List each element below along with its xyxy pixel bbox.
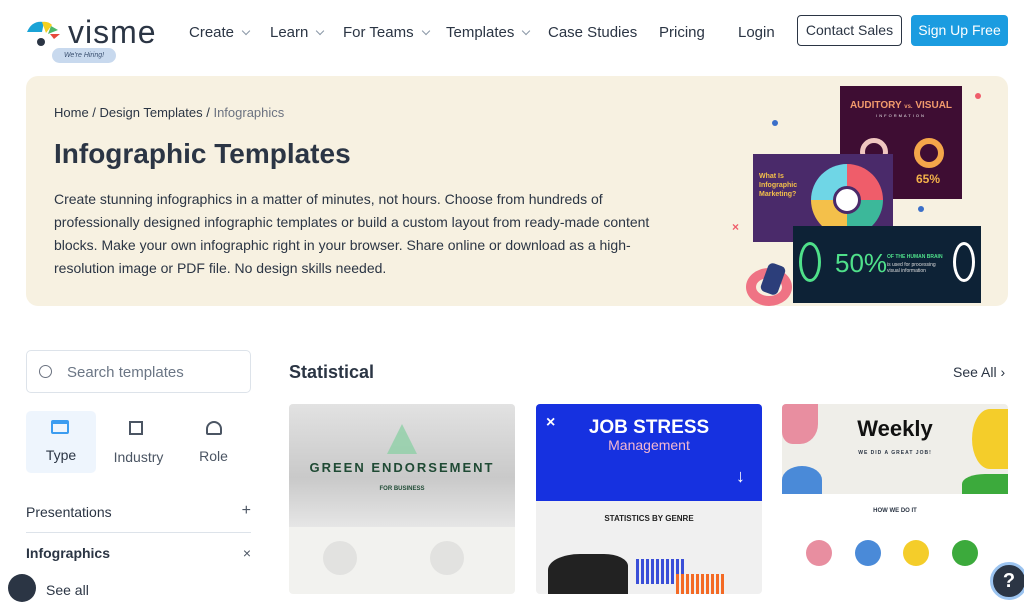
title: Infographic Templates — [54, 138, 351, 169]
card: auditory vs visual: AUDITORY vs. VISUAL — [850, 100, 952, 111]
icon: cookie — [8, 574, 36, 602]
category: presentations: + — [242, 502, 251, 519]
breadcrumb: Home / Design Templates / Infographics — [54, 105, 284, 120]
search box — [26, 350, 251, 393]
card: 50% human brain: visual information — [887, 268, 926, 274]
tab: industry: Industry — [114, 449, 163, 465]
description: Create stunning infographics in a matter of minutes, not hours. Choose from hundreds of professionally designed infographic templates or build a custom layout from ready-made content blocks. Make your own infographic right in your browser. Share online or download as a high-resolution image or PDF file. No design skills needed. — [54, 191, 649, 276]
hero panel — [26, 76, 1008, 306]
button: contact sales: Contact Sales — [806, 22, 893, 38]
category: infographics — [26, 545, 251, 561]
card: what is infographic marketing: Marketing? — [759, 191, 796, 198]
card: what is infographic marketing: What Is — [759, 173, 784, 180]
icon: help button — [990, 562, 1024, 600]
link: see all: See all — [46, 582, 89, 598]
navigation: Case Studies — [548, 24, 637, 41]
button: sign up: Sign Up Free — [918, 22, 1001, 38]
tab: role: Role — [199, 448, 228, 464]
card: 50% human brain: OF THE HUMAN BRAIN — [887, 254, 943, 260]
card: what is infographic marketing — [753, 154, 893, 242]
navigation: Templates — [446, 24, 514, 41]
navigation: Login — [738, 24, 775, 41]
filter tabs — [26, 411, 228, 473]
section heading: Statistical — [289, 362, 374, 382]
card: job stress: STATISTICS BY GENRE — [604, 514, 694, 523]
card: 50% human brain: is used for processing — [887, 262, 936, 268]
tab: type: Type — [46, 447, 76, 463]
card: auditory vs visual — [840, 86, 962, 199]
card: weekly: HOW WE DO IT — [873, 508, 917, 514]
hero illustration — [732, 86, 981, 306]
card: auditory vs visual: INFORMATION — [876, 113, 926, 118]
card: job stress: Management — [608, 437, 690, 453]
category: presentations — [26, 504, 251, 533]
tab: role — [199, 421, 228, 464]
logo: visme — [68, 14, 157, 50]
search box: Search templates — [67, 364, 184, 381]
card: auditory vs visual: 65% — [916, 172, 940, 186]
card: green endorsement: FOR BUSINESS — [379, 486, 424, 492]
3d shape — [746, 268, 792, 306]
navigation: For Teams — [343, 24, 414, 41]
navigation: Learn — [270, 24, 308, 41]
card: what is infographic marketing: Infographic — [759, 182, 797, 189]
card: green endorsement — [289, 404, 515, 594]
button: contact sales — [797, 15, 902, 46]
card: job stress: × — [546, 414, 555, 431]
tab: type — [26, 411, 96, 473]
hero illustration: × — [732, 220, 739, 234]
button: sign up — [911, 15, 1008, 46]
logo — [27, 14, 157, 63]
category: infographics: Infographics — [26, 545, 110, 561]
icon: help button: ? — [1003, 570, 1015, 592]
card: 50% human brain: 50% — [835, 248, 887, 278]
card: green endorsement: GREEN ENDORSEMENT — [310, 460, 494, 475]
category: presentations: Presentations — [26, 504, 112, 520]
tab: industry — [114, 421, 164, 465]
card: weekly: Weekly — [857, 416, 933, 441]
card: weekly — [782, 404, 1008, 594]
logo: We're Hiring! — [64, 52, 104, 59]
navigation: Pricing — [659, 24, 705, 41]
navigation — [189, 15, 1008, 46]
category: infographics: × — [243, 545, 251, 561]
navigation: Create — [189, 24, 234, 41]
hero illustration: × — [842, 89, 848, 100]
card: job stress: ↓ — [736, 466, 745, 486]
card: 50% human brain — [793, 226, 981, 303]
see all link: See All › — [953, 364, 1005, 380]
card: weekly: WE DID A GREAT JOB! — [858, 450, 932, 456]
card: job stress: JOB STRESS — [589, 417, 709, 438]
card: job stress — [536, 404, 762, 594]
